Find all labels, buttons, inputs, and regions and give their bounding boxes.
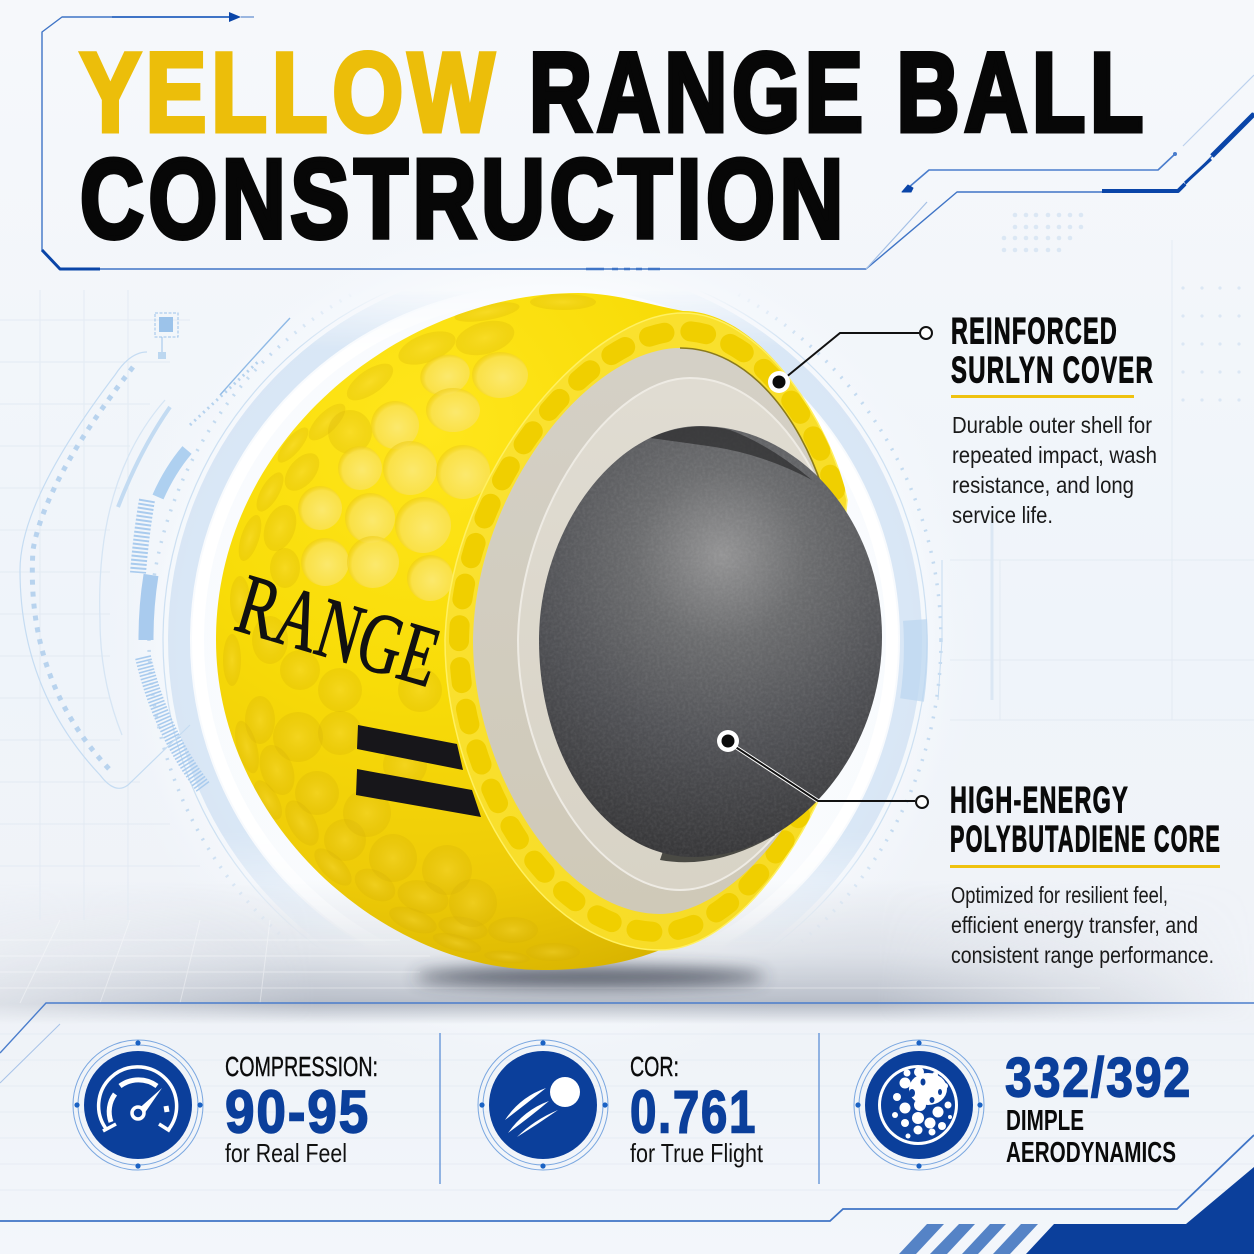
description: resistance, and long: [952, 472, 1134, 498]
callout: reinforced surlyn cover: [768, 310, 1157, 528]
leader line and markers: [768, 327, 932, 393]
callout: high-energy polybutadiene core: [717, 730, 1221, 968]
leader line and markers: [717, 730, 928, 808]
dimple text: AERODYNAMICS: [1006, 1137, 1176, 1169]
cover rim: [445, 313, 847, 950]
stamped RANGE logo: RANGE: [227, 555, 450, 705]
title: [80, 30, 1148, 262]
description: Optimized for resilient feel,: [951, 882, 1168, 908]
mantle layer: [473, 348, 822, 914]
cor text: for True Flight: [630, 1138, 764, 1168]
description: consistent range performance.: [951, 942, 1214, 968]
ball shell with dimples: [216, 293, 847, 970]
stat: compression: [73, 1040, 378, 1170]
hud chip icon: [155, 313, 178, 359]
heading: REINFORCED: [951, 310, 1118, 352]
dimple text: DIMPLE: [1006, 1105, 1084, 1137]
corner accent stripes: [899, 1167, 1254, 1254]
heading: [951, 310, 1154, 390]
description: repeated impact, wash: [952, 442, 1157, 468]
background: [0, 240, 1254, 1190]
description: Durable outer shell for: [952, 412, 1152, 438]
icon: ball in flight: [478, 1040, 608, 1170]
icon: dimpled ball: [854, 1040, 984, 1170]
description: [952, 412, 1157, 528]
double stripes: [356, 725, 481, 817]
stat: cor: [478, 1040, 764, 1170]
compression text: COMPRESSION:: [225, 1051, 378, 1082]
icon: gauge: [73, 1040, 203, 1170]
compression text: 90-95: [225, 1078, 370, 1146]
description: efficient energy transfer, and: [951, 912, 1198, 938]
golf ball cutaway: [216, 293, 890, 970]
title: YELLOW: [80, 30, 499, 155]
heading: [950, 780, 1221, 860]
cor text: 0.761: [630, 1078, 757, 1146]
dimple text: [1005, 1046, 1192, 1169]
stat: dimples: [854, 1040, 1192, 1170]
dimple text: 332/392: [1005, 1046, 1192, 1108]
description: service life.: [952, 502, 1053, 528]
compression text: for Real Feel: [225, 1138, 347, 1168]
bottom panel frame: [0, 1003, 1254, 1221]
heading: HIGH-ENERGY: [950, 780, 1129, 820]
description: [951, 882, 1214, 968]
cor text: COR:: [630, 1051, 679, 1082]
cor text: [630, 1051, 764, 1168]
dot grids: [1002, 213, 1241, 402]
ball ground shadow: [415, 967, 765, 987]
title: CONSTRUCTION: [80, 136, 848, 262]
header circuit frame: [42, 12, 1254, 269]
compression text: [225, 1051, 378, 1168]
hud rings behind ball: [19, 300, 994, 926]
core: [530, 420, 890, 865]
